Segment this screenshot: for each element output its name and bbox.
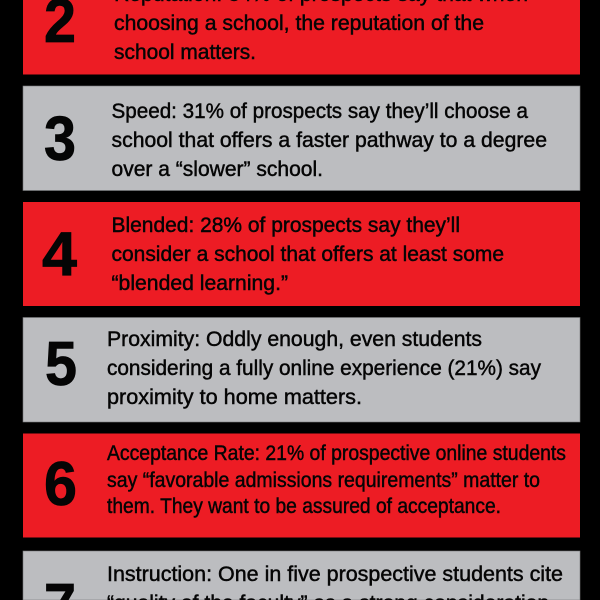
number 4: 4 (42, 220, 78, 289)
text: speed (112, 100, 547, 181)
number 3: 3 (44, 105, 76, 174)
text: instruction (107, 563, 563, 600)
text: blended: consider a school that offers at least some (112, 243, 504, 266)
number 6: 6 (44, 450, 77, 519)
panel: speed (23, 86, 580, 190)
text: proximity: proximity to home matters. (107, 386, 362, 409)
text: proximity: considering a fully online experience (21%) say (107, 357, 541, 380)
panel: proximity (23, 318, 580, 422)
text: reputation: school matters. (114, 41, 256, 64)
text: acceptance rate (107, 442, 566, 518)
text: proximity (107, 328, 541, 409)
text: reputation (114, 0, 528, 64)
text: speed: over a “slower” school. (112, 158, 323, 181)
text: blended: Blended: 28% of prospects say they’ll (112, 214, 460, 237)
panel: acceptance rate (23, 434, 580, 538)
text: blended: “blended learning.” (112, 272, 288, 295)
text: instruction: Instruction: One in five prospective students cite (107, 563, 563, 586)
text: proximity: Proximity: Oddly enough, even students (107, 328, 482, 351)
text: acceptance rate: Acceptance Rate: 21% of prospective online students (107, 442, 566, 465)
text: blended (112, 214, 504, 295)
panel: instruction (23, 551, 580, 600)
text: acceptance rate: them. They want to be assured of acceptance. (107, 495, 501, 518)
panel: blended (23, 202, 580, 306)
text: acceptance rate: say “favorable admissions requirements” matter to (107, 469, 540, 492)
text: speed: school that offers a faster pathway to a degree (112, 129, 547, 152)
number 5: 5 (45, 330, 77, 399)
text: reputation: choosing a school, the reputation of the (114, 12, 484, 35)
panel: reputation (23, 0, 580, 74)
text: speed: Speed: 31% of prospects say they’ll choose a (112, 100, 528, 123)
